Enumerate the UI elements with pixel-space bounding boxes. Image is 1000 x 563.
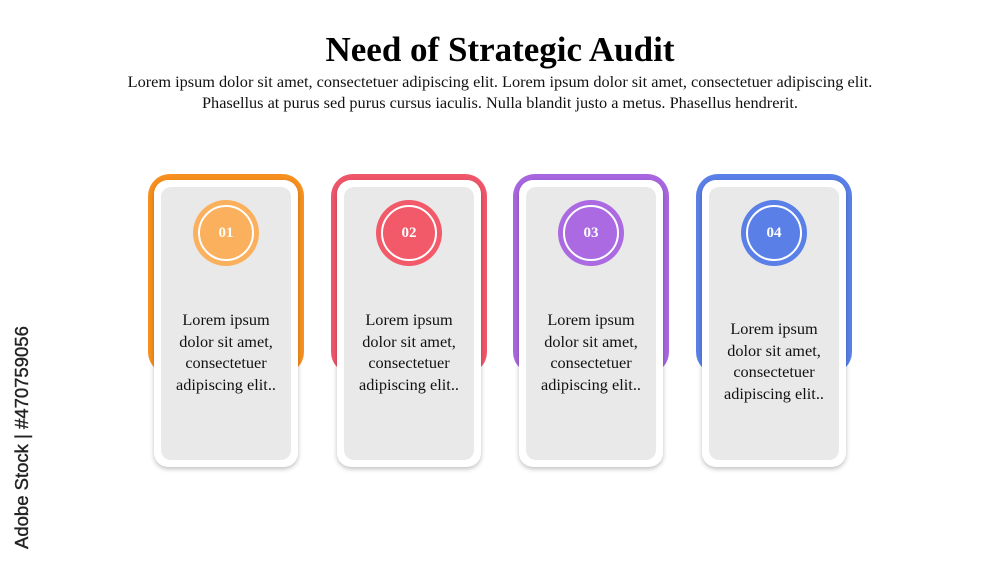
text 04: dolor sit amet, <box>727 340 821 360</box>
panel: card 03 <box>513 174 669 472</box>
text 03: dolor sit amet, <box>544 332 638 350</box>
subtitle text <box>128 72 872 112</box>
text 02: dolor sit amet, <box>362 332 456 350</box>
watermark text: Adobe Stock | #470759056 <box>11 326 32 549</box>
icon: number 01 <box>193 200 259 266</box>
text 04: consectetuer <box>733 362 815 381</box>
icon: number 02 <box>376 200 442 266</box>
subtitle text: Lorem ipsum dolor sit amet, consectetuer adipiscing elit. Lorem ipsum dolor sit amet, consectetuer adipiscing elit. <box>128 72 872 91</box>
panel: card 01 <box>148 174 304 472</box>
text 04 <box>724 319 824 402</box>
icon: number 02: 02 <box>402 225 416 241</box>
text 02: consectetuer <box>368 353 450 372</box>
title: Need of Strategic Audit <box>326 30 674 69</box>
text 01: adipiscing elit.. <box>176 374 276 394</box>
text 03 <box>541 310 641 394</box>
icon: number 01: 01 <box>218 225 234 241</box>
text 01: Lorem ipsum <box>182 310 270 329</box>
icon: number 03: 03 <box>584 225 598 241</box>
text 02 <box>359 310 459 394</box>
panel: card 02 <box>331 174 487 472</box>
text 01: consectetuer <box>185 353 267 372</box>
text 04: Lorem ipsum <box>730 319 818 338</box>
text 01 <box>176 310 276 394</box>
text 04: adipiscing elit.. <box>724 384 824 402</box>
text 03: adipiscing elit.. <box>541 374 641 394</box>
icon: number 04 <box>741 200 807 266</box>
icon: number 04: 04 <box>766 225 782 241</box>
text 02: adipiscing elit.. <box>359 374 459 394</box>
text 03: Lorem ipsum <box>547 310 635 329</box>
text 03: consectetuer <box>550 353 632 372</box>
icon: number 03 <box>558 200 624 266</box>
panel: card 04 <box>696 174 852 472</box>
text 01: dolor sit amet, <box>179 332 273 350</box>
subtitle text: Phasellus at purus sed purus cursus iaculis. Nulla blandit justo a metus. Phasellus hendrerit. <box>202 93 798 112</box>
text 02: Lorem ipsum <box>365 310 453 329</box>
